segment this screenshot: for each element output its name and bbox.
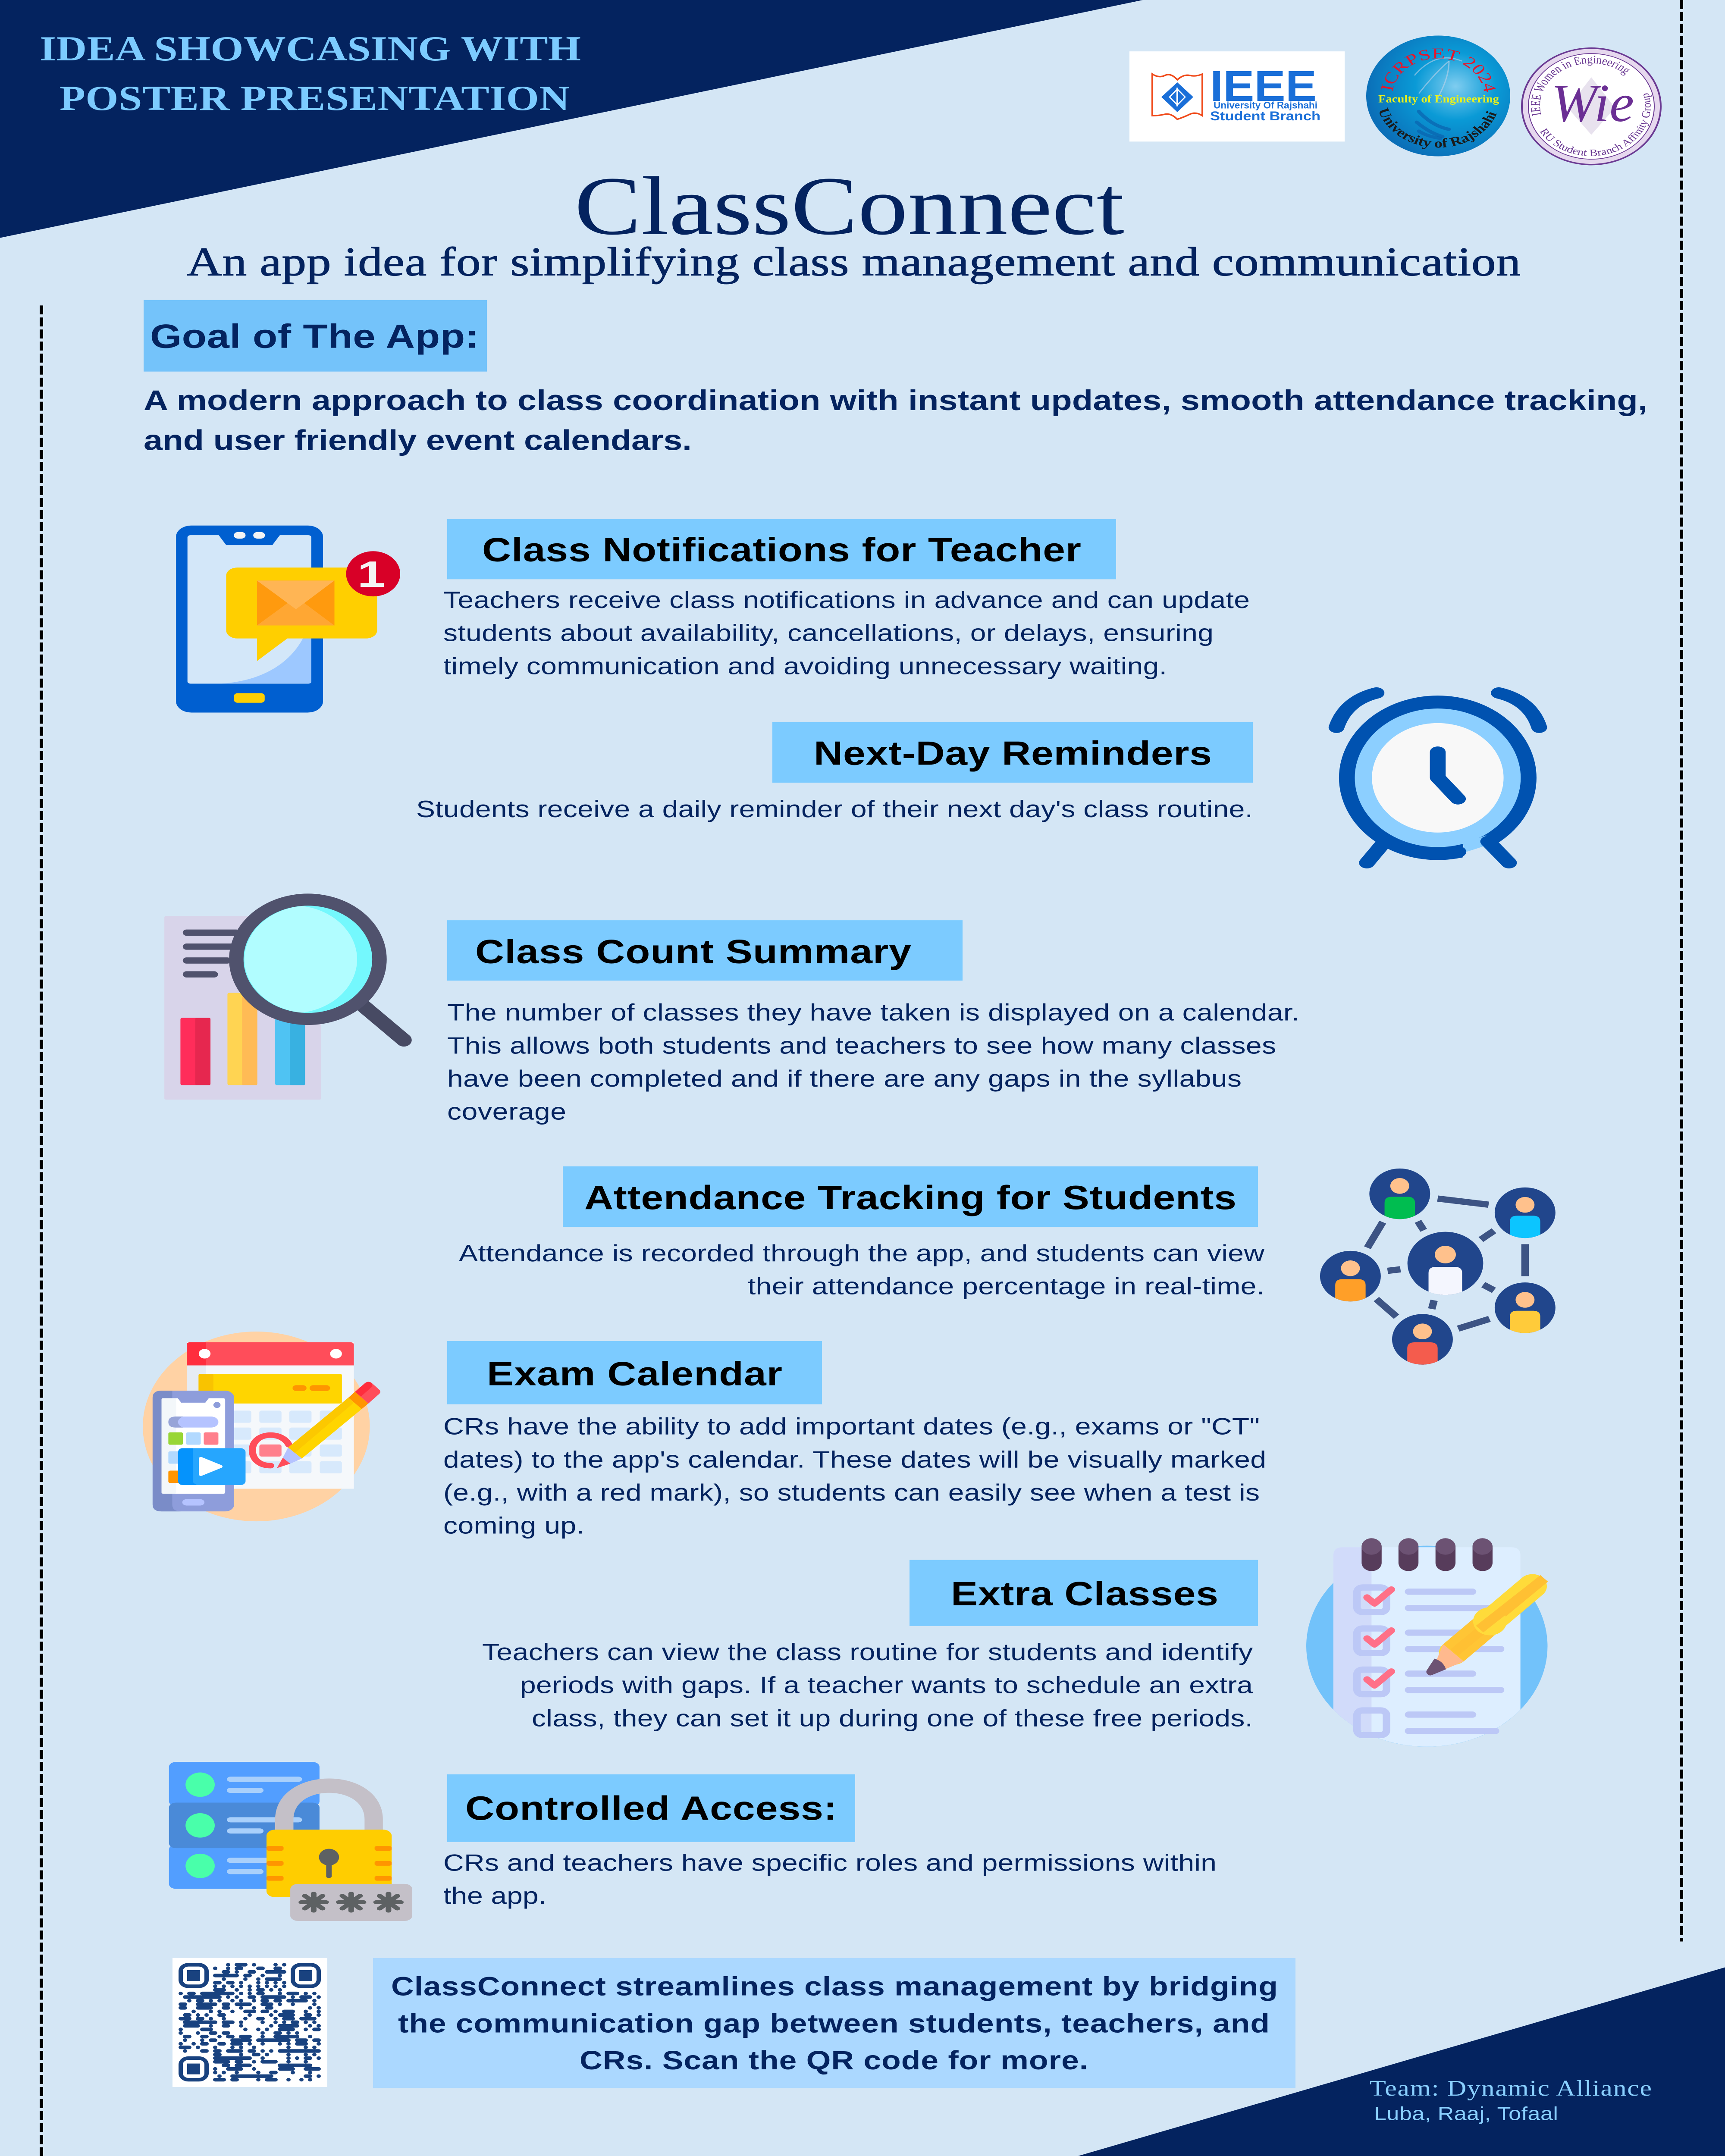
panel: class count summary — [164, 893, 1299, 1125]
bottom-right banner: team credits: Luba, Raaj, Tofaal — [1374, 2104, 1558, 2125]
goal description: A modern approach to class coordination with instant updates, smooth attendance tracking, — [144, 385, 1647, 416]
panel: controlled access — [169, 1762, 1217, 1921]
logo: IEEE student branch: IEEE — [1210, 63, 1317, 110]
bottom-right banner: team credits — [1078, 1967, 1725, 2156]
heading: next-day reminders — [772, 722, 1253, 783]
logo: ICRPSET 2024 — [1366, 35, 1510, 156]
icon: bar chart and magnifier — [164, 893, 404, 1100]
callout: closing statement — [373, 1958, 1295, 2088]
goal description — [144, 385, 1647, 456]
heading: attendance tracking: Attendance Tracking for Students — [584, 1179, 1236, 1216]
logo: IEEE student branch: University Of Rajshahi — [1214, 100, 1317, 111]
body text: class notifications: Teachers receive class notifications in advance and can update — [443, 586, 1250, 613]
body text: exam calendar: dates) to the app's calendar. These dates will be visually marked — [443, 1446, 1266, 1473]
icon: phone with message notification: 1 — [358, 553, 386, 595]
logo: IEEE student branch: Student Branch — [1210, 109, 1320, 123]
heading: attendance tracking — [563, 1166, 1258, 1227]
icon: people network — [1320, 1169, 1556, 1365]
body text: extra classes: periods with gaps. If a teacher wants to schedule an extra — [520, 1672, 1253, 1698]
body text: exam calendar: coming up. — [443, 1512, 584, 1539]
bottom-right banner: team credits: Team: Dynamic Alliance — [1370, 2076, 1652, 2101]
body text: class notifications — [443, 586, 1250, 679]
heading: next-day reminders: Next-Day Reminders — [814, 735, 1212, 772]
callout: closing statement: the communication gap between students, teachers, and — [398, 2009, 1270, 2038]
top-left banner: POSTER PRESENTATION — [60, 79, 570, 118]
heading: exam calendar: Exam Calendar — [487, 1356, 782, 1393]
icon: server with padlock — [169, 1762, 412, 1921]
body text: class notifications: students about availability, cancellations, or delays, ensuring — [443, 620, 1214, 646]
logo: IEEE Women in Engineering: Wie — [1551, 73, 1634, 133]
body text: extra classes: Teachers can view the class routine for students and identify — [482, 1639, 1253, 1665]
icon: phone with message notification — [176, 526, 400, 712]
body text: attendance tracking: their attendance percentage in real-time. — [748, 1273, 1264, 1299]
goal heading: Goal of The App: — [150, 318, 479, 355]
body text: exam calendar: (e.g., with a red mark), so students can easily see when a test is — [443, 1479, 1260, 1506]
heading: extra classes: Extra Classes — [951, 1576, 1218, 1613]
callout: closing statement: ClassConnect streamlines class management by bridging — [391, 1972, 1278, 2001]
goal description: and user friendly event calendars. — [144, 424, 692, 456]
heading: class count summary — [447, 920, 963, 981]
body text: class count summary: have been completed and if there are any gaps in the syllabus — [447, 1065, 1242, 1092]
icon: checklist notepad and pencil — [1306, 1538, 1547, 1747]
heading: exam calendar — [447, 1341, 822, 1404]
body text: class count summary: This allows both students and teachers to see how many classes — [447, 1032, 1276, 1059]
top-left banner — [0, 0, 1143, 238]
heading: extra classes — [910, 1560, 1258, 1626]
body text: next-day reminders: Students receive a daily reminder of their next day's class routine. — [416, 796, 1253, 822]
heading: controlled access: Controlled Access: — [465, 1790, 837, 1827]
heading: class count summary: Class Count Summary — [475, 934, 911, 971]
logo: ICRPSET 2024: ICRPSET 2024 — [1377, 46, 1499, 94]
QR code — [172, 1958, 327, 2087]
panel: class notifications — [176, 519, 1250, 712]
icon: calendar with phone and pencil — [143, 1332, 380, 1521]
body text: extra classes — [482, 1639, 1253, 1731]
body text: controlled access: the app. — [443, 1882, 546, 1909]
body text: extra classes: class, they can set it up during one of these free periods. — [532, 1705, 1253, 1731]
body text: exam calendar — [443, 1413, 1266, 1539]
icon: alarm clock — [1336, 693, 1539, 864]
body text: attendance tracking — [459, 1240, 1265, 1299]
body text: attendance tracking: Attendance is recorded through the app, and students can view — [459, 1240, 1265, 1266]
logo: ICRPSET 2024: University of Rajshahi — [1374, 106, 1500, 151]
subtitle: An app idea for simplifying class management and communication — [187, 239, 1521, 284]
panel: attendance tracking — [459, 1166, 1556, 1365]
top-left banner: IDEA SHOWCASING WITH — [40, 29, 581, 68]
body text: controlled access — [443, 1849, 1217, 1909]
heading: controlled access — [447, 1774, 855, 1842]
logo: IEEE Women in Engineering: IEEE Women in Engineering — [1528, 53, 1633, 117]
panel: next-day reminders — [416, 693, 1539, 864]
logo: IEEE Women in Engineering — [1522, 48, 1661, 165]
body text: class count summary: coverage — [447, 1098, 566, 1125]
heading: class notifications — [447, 519, 1116, 579]
heading: class notifications: Class Notifications for Teacher — [482, 532, 1081, 569]
body text: class notifications: timely communication and avoiding unnecessary waiting. — [443, 653, 1167, 679]
panel: extra classes — [482, 1538, 1547, 1747]
body text: class count summary: The number of classes they have taken is displayed on a calendar. — [447, 999, 1299, 1025]
logo: IEEE student branch — [1129, 51, 1345, 141]
body text: controlled access: CRs and teachers have specific roles and permissions within — [443, 1849, 1217, 1876]
logo: IEEE Women in Engineering: RU Student Branch Affinity Group — [1537, 92, 1653, 158]
goal heading — [144, 300, 487, 372]
body text: exam calendar: CRs have the ability to add important dates (e.g., exams or "CT" — [443, 1413, 1260, 1439]
callout: closing statement: CRs. Scan the QR code for more. — [580, 2046, 1088, 2075]
body text: class count summary — [447, 999, 1299, 1125]
logo: ICRPSET 2024: Faculty of Engineering — [1378, 93, 1499, 105]
panel: exam calendar — [143, 1332, 1266, 1539]
panel: goal of the app — [144, 300, 1647, 456]
title: ClassConnect — [574, 160, 1124, 252]
